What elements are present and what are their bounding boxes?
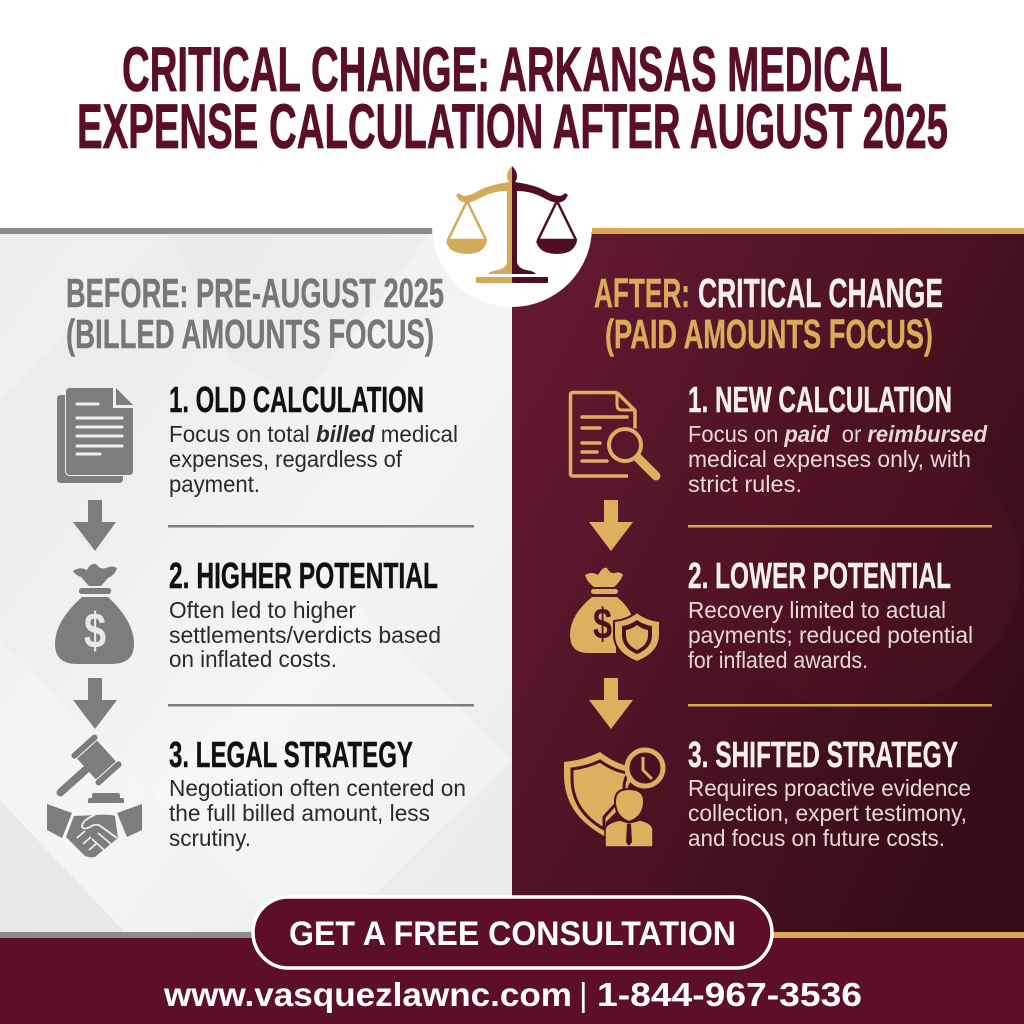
website and phone: |	[579, 976, 588, 1013]
arrow: old to higher	[73, 500, 116, 551]
arrow: new to lower	[589, 500, 633, 551]
item: lower potential: payments; reduced potential	[688, 622, 973, 648]
item: old calculation: 1. OLD CALCULATION	[169, 379, 424, 420]
item: old calculation: expenses, regardless of	[169, 446, 403, 472]
panel: before	[0, 228, 512, 938]
item: higher potential: on inflated costs.	[169, 646, 337, 672]
arrow: higher to legal	[73, 678, 117, 729]
website and phone: www.vasquezlawnc.com	[163, 976, 572, 1013]
footer band	[0, 932, 1024, 1024]
item: legal strategy: Negotiation often centered on	[169, 775, 466, 801]
item: lower potential: Recovery limited to actual	[688, 597, 946, 623]
icon: money bag with shield: $	[593, 600, 612, 649]
item: higher potential	[169, 555, 441, 672]
item: new calculation: medical expenses only, with	[688, 446, 971, 472]
item: legal strategy	[169, 734, 466, 851]
item: old calculation: Focus on total billed medical	[169, 421, 458, 447]
item: old calculation: payment.	[169, 471, 260, 497]
item: higher potential: Often led to higher	[169, 597, 356, 623]
item: shifted strategy	[688, 734, 971, 851]
item: shifted strategy: Requires proactive evidence	[688, 775, 971, 801]
heading: after: AFTER:	[594, 270, 690, 316]
item: shifted strategy: collection, expert testimony,	[688, 800, 967, 826]
icon: money bag	[55, 564, 134, 664]
item: new calculation: strict rules.	[688, 471, 802, 497]
heading: after	[594, 270, 943, 357]
item: lower potential: for inflated awards.	[688, 647, 868, 673]
item: legal strategy: scrutiny.	[169, 825, 251, 851]
heading: before: BEFORE: PRE-AUGUST 2025	[66, 270, 444, 316]
icon: money bag with shield	[570, 568, 660, 662]
item: higher potential: settlements/verdicts based	[169, 622, 441, 648]
heading: before: (BILLED AMOUNTS FOCUS)	[66, 311, 434, 357]
item: shifted strategy: and focus on future costs.	[688, 825, 945, 851]
dividers: before	[168, 525, 474, 706]
icon: money bag: $	[84, 603, 106, 659]
title	[77, 35, 948, 162]
item: higher potential: 2. HIGHER POTENTIAL	[169, 555, 438, 596]
icon: shield clock person	[564, 750, 663, 847]
item: legal strategy: the full billed amount, less	[169, 800, 430, 826]
icon: documents	[57, 388, 133, 483]
item: lower potential	[688, 555, 973, 673]
call to action button	[253, 897, 772, 968]
dividers: after	[688, 525, 992, 706]
gold half	[446, 166, 512, 283]
icon: document with magnifier	[570, 392, 656, 476]
emblem: scales of justice	[432, 147, 592, 307]
item: old calculation	[169, 379, 458, 497]
icon: gavel and handshake	[43, 733, 142, 857]
arrow: lower to shifted	[589, 678, 633, 729]
call to action button: GET A FREE CONSULTATION	[289, 915, 736, 953]
panel: after	[512, 228, 1024, 938]
website and phone: 1-844-967-3536	[597, 976, 862, 1013]
item: new calculation: Focus on paid or reimbursed	[688, 421, 988, 447]
website and phone	[163, 976, 862, 1013]
item: legal strategy: 3. LEGAL STRATEGY	[169, 734, 413, 775]
heading: before	[66, 270, 444, 357]
item: new calculation	[688, 379, 988, 497]
maroon half	[512, 166, 577, 283]
